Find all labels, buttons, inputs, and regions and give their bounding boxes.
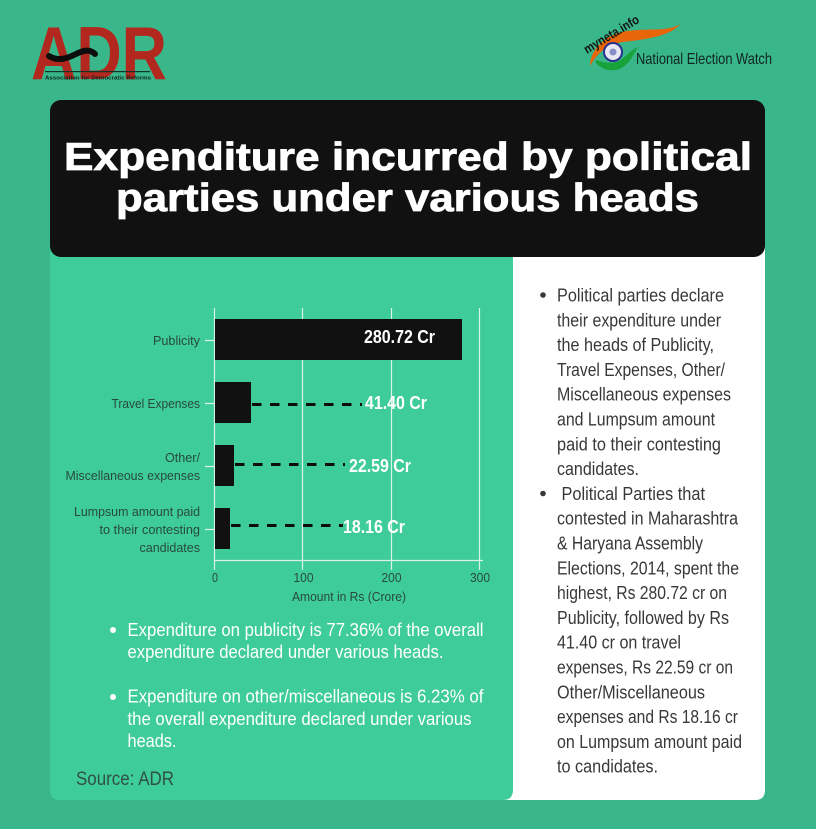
category labels: candidates	[140, 540, 200, 555]
bar: Lumpsum amount	[215, 508, 230, 549]
commentary text: Political Parties that	[562, 484, 705, 504]
source: Source: ADR	[76, 769, 174, 790]
bar: Publicity	[215, 319, 462, 360]
key findings	[110, 619, 484, 751]
category labels: Other/	[165, 450, 200, 465]
title: Expenditure incurred by political	[64, 136, 752, 179]
axis tick labels	[212, 570, 490, 585]
commentary text: contested in Maharashtra	[557, 509, 739, 529]
category labels: Publicity	[153, 333, 200, 348]
value labels	[343, 327, 435, 537]
key findings: the overall expenditure declared under various	[128, 708, 472, 729]
commentary text: paid to their contesting	[557, 434, 721, 454]
key findings: Expenditure on other/miscellaneous is 6.23% of	[128, 686, 484, 706]
commentary text: the heads of Publicity,	[557, 335, 714, 355]
commentary text: expenses, Rs 22.59 cr on	[557, 658, 733, 678]
value labels: 18.16 Cr	[343, 517, 405, 537]
commentary text: to candidates.	[557, 757, 658, 777]
logo: ADR: Association for Democratic Reforms	[45, 76, 151, 82]
panel: white commentary	[500, 240, 765, 800]
commentary text: Travel Expenses, Other/	[557, 360, 725, 380]
key findings: Expenditure on publicity is 77.36% of the overall	[128, 619, 484, 640]
axis tick labels: 100	[294, 570, 314, 585]
logo: National Election Watch: National Election Watch	[636, 51, 772, 68]
value labels: 280.72 Cr	[364, 327, 435, 347]
bar: Travel Expenses	[215, 382, 251, 423]
commentary text: and Lumpsum amount	[557, 410, 715, 430]
commentary text: Political parties declare	[557, 286, 724, 306]
category labels: to their contesting	[100, 522, 200, 537]
commentary text: candidates.	[557, 459, 639, 479]
title	[64, 136, 752, 220]
category labels: Miscellaneous expenses	[66, 468, 200, 483]
commentary text: on Lumpsum amount paid	[557, 732, 742, 752]
value labels: 22.59 Cr	[349, 456, 411, 476]
logo: National Election Watch: myneta.info	[581, 12, 642, 57]
logo: National Election Watch	[581, 12, 772, 70]
commentary text: Miscellaneous expenses	[557, 385, 731, 405]
commentary text: 41.40 cr on travel	[557, 633, 681, 653]
commentary text: their expenditure under	[557, 310, 721, 330]
key findings: heads.	[128, 730, 176, 751]
key findings: expenditure declared under various heads.	[128, 641, 444, 662]
value labels: 41.40 Cr	[365, 393, 427, 413]
category labels: Travel Expenses	[112, 396, 200, 411]
category labels	[66, 333, 200, 555]
logo: ADR: ADR	[31, 11, 167, 95]
axis tick labels: 200	[382, 570, 402, 585]
panel: green chart	[50, 240, 513, 800]
commentary text: highest, Rs 280.72 cr on	[557, 583, 727, 603]
axis title: Amount in Rs (Crore)	[292, 589, 406, 604]
title: parties under various heads	[116, 177, 699, 220]
commentary text: Publicity, followed by Rs	[557, 608, 729, 628]
commentary text: Other/Miscellaneous	[557, 682, 705, 702]
bar: Other/Miscellaneous expenses	[215, 445, 234, 486]
commentary text: expenses and Rs 18.16 cr	[557, 707, 738, 727]
commentary text: Elections, 2014, spent the	[557, 558, 739, 578]
commentary text	[540, 286, 742, 777]
axis tick labels: 300	[470, 570, 490, 585]
axis tick labels: 0	[212, 570, 218, 585]
title banner	[50, 100, 765, 257]
category labels: Lumpsum amount paid	[74, 504, 200, 519]
bar chart	[66, 308, 490, 604]
commentary text: & Haryana Assembly	[557, 534, 703, 554]
